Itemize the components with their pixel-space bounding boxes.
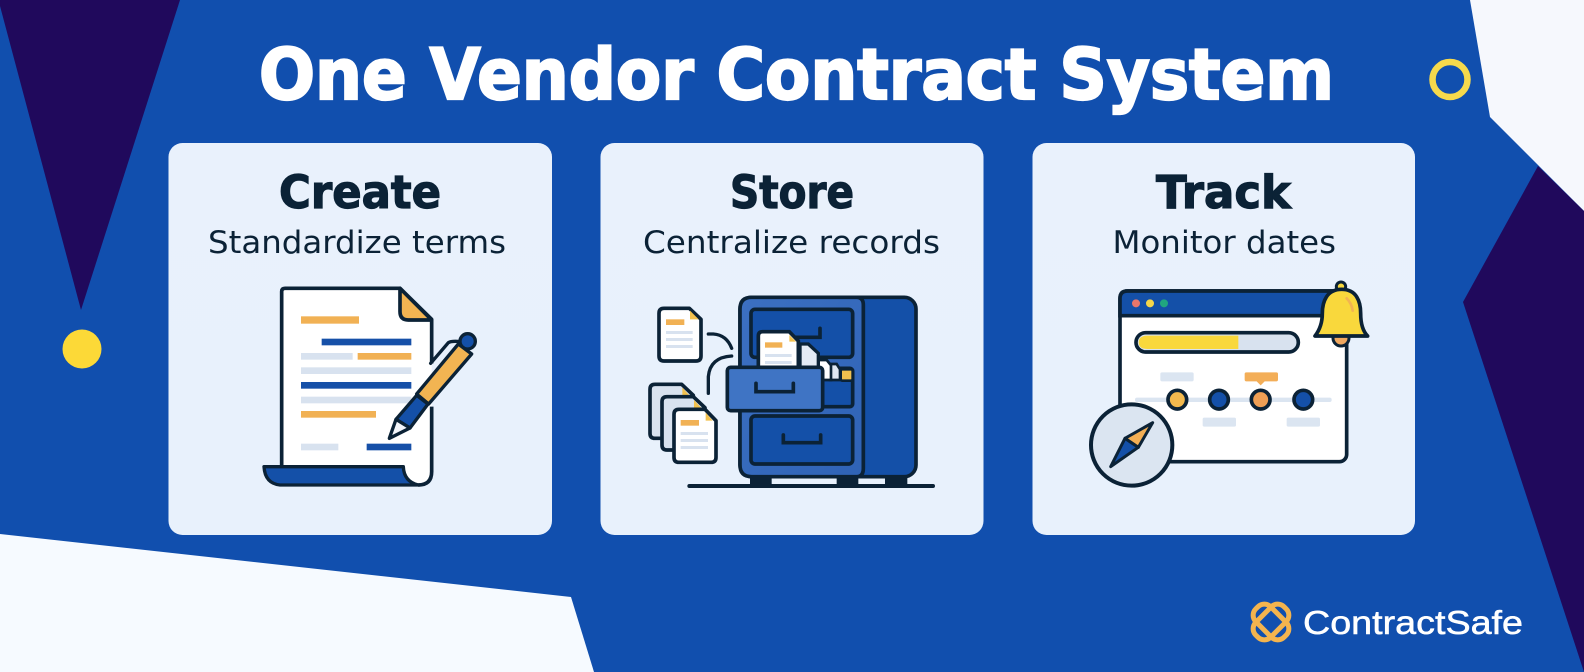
subheading: monitor dates: Monitor dates [1112, 225, 1336, 261]
title: One Vendor Contract System [259, 34, 1334, 116]
subheading: standardize terms: Standardize terms [208, 225, 506, 261]
icon: dashboard with bell and compass [1091, 282, 1368, 486]
wordmark: ContractSafe [1303, 604, 1523, 641]
subheading: centralize records: Centralize records [643, 225, 940, 261]
icon: logo mark [1249, 600, 1293, 644]
background shape: dark triangle top left [0, 0, 180, 310]
heading: store: Store [730, 166, 854, 219]
heading: track: Track [1156, 166, 1292, 219]
background shape: dark polygon right [1463, 166, 1584, 672]
decorative yellow ring [1432, 62, 1468, 97]
background shape: white top right [1470, 0, 1584, 211]
panel: track [1032, 143, 1415, 535]
icon: filing cabinet with documents [650, 297, 935, 488]
icon: document and pen [264, 288, 475, 485]
panel: create [168, 143, 552, 535]
panel: store [600, 143, 984, 535]
background shape: white bottom left [0, 534, 594, 672]
logo: contractsafe [1249, 600, 1523, 644]
heading: create: Create [279, 166, 441, 219]
decorative yellow dot [62, 330, 102, 368]
